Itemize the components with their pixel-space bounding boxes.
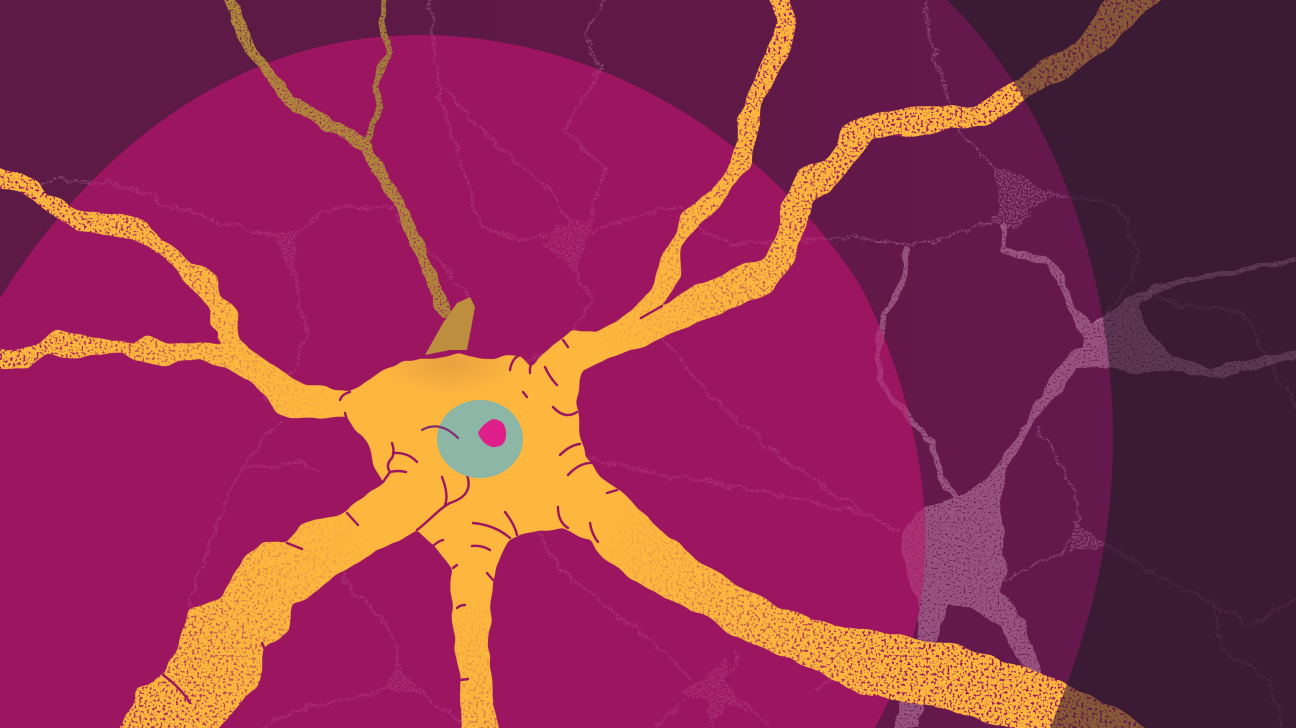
thin branches, dark zone [1071, 195, 1296, 728]
large right neuron, dark zone [1102, 257, 1296, 378]
muted stub at the cell body [425, 297, 475, 355]
darkened part in outer zone [1013, 0, 1161, 728]
nucleolus [478, 419, 506, 447]
brownish shading at top of body [406, 354, 494, 384]
dark outer region [947, 0, 1296, 728]
thin branches and small somas, mid zone [0, 0, 1105, 582]
crease across nucleus [422, 426, 458, 438]
muted upper dendrite [228, 0, 475, 355]
wobbling muted branches [228, 0, 444, 312]
thin branches and small somas, magenta zone [88, 35, 902, 728]
main muted branch [228, 0, 444, 312]
large right neuron, mid zone [880, 224, 1110, 728]
thin side branch [368, 0, 388, 140]
large right neuron, magenta zone [874, 327, 926, 617]
large magenta disc [0, 35, 926, 728]
nucleus disc [437, 400, 523, 478]
cell nucleus [422, 400, 523, 478]
crease lines [163, 306, 662, 703]
